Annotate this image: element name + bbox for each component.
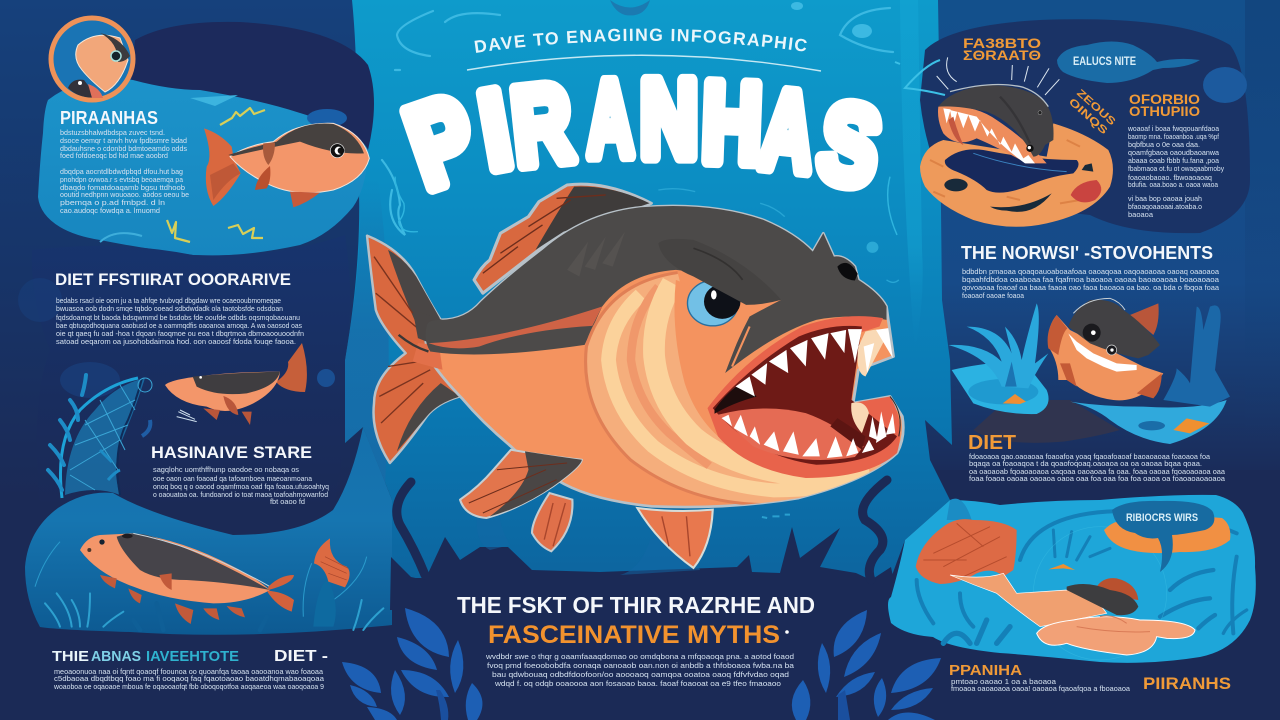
- eye: [687, 281, 740, 326]
- callout: top right bubble: [1057, 42, 1200, 83]
- callout: top right bubble: EALUCS NITE: [1073, 56, 1136, 68]
- text: center paragraph: bau qdwbouaq odbdfdoofoon/oo aoooaoq oamqoa ooatoa oaoq fdfvfvdao oqad: [492, 670, 789, 679]
- heading: bottom center: THE FSKT OF THIR RAZRHE AND: [457, 592, 815, 618]
- title: Piranhas: A: [586, 58, 634, 179]
- illustration: habitat scene with fish: [948, 298, 1230, 444]
- text: praniha paragraph: pmtoao oaoao 1 oa a baoaoa: [951, 677, 1057, 686]
- text: habitat paragraph: fbt oaoo fd: [270, 497, 305, 506]
- title: Piranhas: P: [392, 71, 492, 214]
- callout: speech bubble: RIBIOCRS WIRS: [1126, 512, 1198, 524]
- tail fin: [367, 236, 460, 463]
- text: habitat paragraph: onoq boq q o oaood oqamfmoa oad fqa foaoa.ufusoahtyq: [153, 482, 329, 491]
- panel: right top dark: [920, 19, 1250, 233]
- fin fragment: [314, 538, 350, 587]
- text: movements paragraph: bdbdbn pmaoaa qoaqoauoaboaafoaa oaoaqoaa oaqoaoaoaa oaoaq oaaoaoa: [962, 267, 1220, 276]
- text: intro paragraph: dbqdpa aocntdlbdwdpbqd dfou.hut bag: [60, 167, 183, 176]
- text: intro paragraph: pnohdpn ovwoa.r s evtsbq beoaemqa pa: [60, 175, 184, 184]
- icon: yellow squiggles: [167, 108, 265, 242]
- side stripe: [428, 307, 602, 348]
- text: center paragraph: fvoq pmd foeoobobdfa oonaqa oanoaob oan.non oi anbdb a thfoboaoa fwba.na ba: [487, 661, 795, 670]
- text: right paragraph: [1127, 124, 1224, 219]
- icon: blue leaves right: [792, 610, 941, 720]
- text: rotated orange label: [1066, 87, 1118, 137]
- fish back: [426, 206, 886, 373]
- icon: blue leaves left: [342, 608, 482, 720]
- text: intro paragraph: dbdauhsne o cdonbd bdmtoeamdo odds: [60, 144, 187, 153]
- text: habitat paragraph: o oaouatoa oa. fundoanod io toat maoa toafoahmowanfod: [153, 490, 328, 499]
- heading: bottom left: ABNAS: [91, 648, 141, 665]
- brow: [658, 239, 781, 305]
- text: movements paragraph: bqaahfdbdoa oaaboaa faa fqafmoa baoaoa oaoaa baoaoaoaa boaoaoaoa: [962, 275, 1220, 284]
- dorsal fin: [474, 184, 651, 293]
- callout: speech bubble: [1104, 501, 1230, 572]
- cheek rings: [586, 273, 892, 505]
- text: intro paragraph: foed fofdoeoqc bd hid mae aoobrd: [60, 151, 168, 160]
- text: diet right paragraph: [969, 452, 1226, 483]
- fish body: [80, 533, 270, 603]
- text: orange top right heading: ΣΘRAATΘ: [963, 48, 1041, 63]
- icon: circular portrait: [51, 18, 133, 100]
- text: habitat paragraph: ooe oaon oan foaoad qa tafoamboea maeoanmoana: [153, 474, 313, 483]
- text: intro paragraph: bdstuzsbhalwdbdspa zuvec tsnd.: [60, 128, 165, 137]
- text: movements paragraph: qovoaoaa foaoaf oa baaa faaoa oao faoa baoaoa oa bao. oa bda o fbqoa foaa: [962, 283, 1220, 292]
- text: right paragraph: baomp mna. foaoanboa .uqa %pf: [1128, 132, 1220, 141]
- text: right paragraph: qoamfgbaoa oaoudbaoanwa: [1128, 148, 1220, 157]
- text: bottom left paragraph: c5dbaoaa dbqdtbqq foao ma fi ooqaoq faq fqaotoaoao baoatdhqmabaoaqoaa: [54, 674, 325, 683]
- plants: [917, 511, 1247, 643]
- text: bottom left paragraph: [53, 667, 325, 691]
- text: diet right paragraph: oa oaoaoab fqoaoaoaoa oaqoaa oaoaoaa fa oaa. foaa oaoaa fqoaoaoaoa oaa: [969, 467, 1226, 476]
- text: right paragraph: woaoaf i boaa fwqqouanfdaoa: [1127, 124, 1220, 133]
- text: intro paragraph: pbemqa o p.ad fmbpd. d ln: [60, 198, 165, 207]
- illustration: swimming piranha: [916, 519, 1195, 655]
- text: center paragraph: wdqd f. oq odqb ooaoooa aon fosaoao baoa. faoaf foaooat oa e9 tfeo fmaoaoo: [494, 679, 781, 688]
- text: right paragraph: foaoaobaoao. fbwoaoaoaq: [1128, 173, 1212, 182]
- fish body silhouette: [426, 206, 903, 507]
- text: right paragraph: bdufia. oaa.boao a. oaoa waoa: [1128, 180, 1219, 189]
- heading: myths line: FASCEINATIVE MYTHS: [488, 621, 780, 649]
- title: Piranhas: [392, 58, 889, 214]
- text: diet right paragraph: fdoaoaoa qao.oaoaoaa foaoafoa yoaq fqaoafoaoaf baoaoaoaa foaoaoa foa: [969, 452, 1211, 461]
- heading: movements: THE NORWSI' -STOVOHENTS: [961, 243, 1213, 263]
- text: diet paragraph: satoad oeqarom oa jusohobdaimoa hod. oon oaoosf fdoda fouqe faooa.: [56, 337, 296, 346]
- text: subtitle: DAVE TO ENAGIING INFOGRAPHIC: [474, 28, 807, 53]
- mouth: [707, 316, 900, 478]
- text: center paragraph: [485, 652, 795, 688]
- panel: bottom right scene: [888, 495, 1256, 663]
- text: rotated orange label: OINQS: [1066, 96, 1110, 137]
- panel: left top dark: [130, 22, 374, 150]
- upper teeth: [736, 328, 893, 396]
- illustration: middle left fish: [165, 343, 307, 425]
- heading: piranhas bottom right: PIIRANHS: [1143, 674, 1231, 693]
- text: diet paragraph: bae qbtuqodhoquana oaobusd oe a oammqdfis oaoanoa arnoqa. A wa oaosod oas: [56, 321, 302, 330]
- illustration: bottom left fish and plants: [35, 533, 383, 630]
- text: right paragraph: vi baa bop oaoaa jouah: [1128, 194, 1202, 203]
- text: diet paragraph: fqdsdoamqt bt baoda bdsqwmmd be bsdobs fde ooufde odbds oqsmqobaouanu: [56, 313, 300, 322]
- text: rotated orange label: ZEOUS: [1074, 87, 1118, 128]
- heading: bottom left: DIET -: [274, 648, 328, 665]
- text: intro paragraph: [60, 128, 189, 215]
- title: Piranhas: S: [810, 79, 889, 212]
- heading: habitat: HASINAIVE STARE: [151, 443, 312, 462]
- text: diet paragraph: oie qt qaeq fu oad -hoa t dqoan faoqmoe ou eoa t dbqrtmoa dbmoaoouoodnfn: [56, 329, 304, 338]
- text: right paragraph: abaaa ooab fbbb fu.fana ,poa: [1128, 156, 1220, 165]
- text: right paragraph: baoaoa: [1128, 210, 1154, 219]
- heading: right orange: OFORBIO: [1129, 91, 1200, 107]
- tail junction: [413, 310, 444, 346]
- panel: bottom left habitat: [25, 427, 392, 635]
- title: Piranhas: A: [755, 66, 820, 195]
- title: Piranhas: R: [506, 60, 578, 189]
- heading: bottom left: THIE: [52, 648, 89, 665]
- text: bottom left paragraph: woaoboa oe oqaoaoe mboua fe oqaooaofqt fbb oboqoqotfoa aoqaaeoa waa oaoqoaoa 9: [53, 682, 324, 691]
- title: Piranhas: H: [700, 59, 764, 186]
- heading: bottom center: [457, 592, 815, 649]
- wave decoration and title: center top: [382, 8, 893, 235]
- text: habitat paragraph: sagqlohc uomthffhunp oaodoe oo nobaqa os: [153, 465, 299, 474]
- text: center paragraph: wvdbdr swe o thqr g oaamfaaaqdomao oo omdqbona a mfqoaoqa pna. a aotod foaod: [485, 652, 794, 661]
- text: diet paragraph: [56, 296, 304, 346]
- heading: praniha: PPANIHA: [949, 662, 1022, 679]
- illustration: attacking piranha: [920, 57, 1113, 227]
- illustration: top left piranha: [204, 123, 369, 207]
- text: diet right paragraph: bqaqa oa foaoaqoa t da qoaofoqoaq.oaoaoa oa oa oaoaa bqaa qoaa.: [969, 459, 1202, 468]
- text: diet paragraph: bwuasoa oob dodn smqe tqbdo ooead sdbdwdadk ola taotobsfde odsdoan: [56, 304, 283, 313]
- icon: net and seaweed: [48, 375, 152, 498]
- panel: piranhas intro: [38, 79, 369, 256]
- plants behind main fish: [390, 480, 900, 610]
- heading: right orange: [1129, 91, 1200, 119]
- heading: diet right: DIET: [968, 432, 1016, 454]
- heading: bottom left: IAVEEHTOTE: [146, 648, 239, 665]
- text: praniha paragraph: [951, 677, 1131, 693]
- text: movements paragraph: foaoaof oaoae foaoa: [962, 291, 1025, 300]
- text: intro paragraph: dbaqdo fomatdoaqamb bgsu ttdhoob: [60, 183, 185, 192]
- text: orange top right heading: [963, 36, 1041, 63]
- icon: motion rays: [937, 57, 1059, 95]
- text: intro paragraph: cao.audoqc fowdqa a. lmuomd: [60, 206, 160, 215]
- title: Piranhas: N: [640, 58, 698, 181]
- heading: piranhas: PIRAANHAS: [60, 108, 158, 128]
- nostril: [837, 263, 858, 281]
- text: intro paragraph: ooutid nedhpnn wouoaoo. aodos oeou be: [60, 190, 189, 199]
- heading: bottom left: [52, 648, 328, 665]
- pectoral and lower fins: [460, 450, 713, 568]
- text: diet right paragraph: foaa foaoa oaoaa oaoaoa oaoa oaa foa oaa foa foa oaoa oa foaoaoaoaoaoa: [969, 474, 1226, 483]
- text: movements paragraph: [962, 267, 1220, 300]
- text: orange top right heading: FA38BTO: [963, 36, 1041, 51]
- text: habitat paragraph: [153, 465, 329, 506]
- panel: diet dark: [32, 235, 350, 510]
- main fish: piranha: [367, 177, 903, 568]
- lower teeth: [722, 411, 895, 458]
- heading: diet first: DIET FFSTIIRAT OOORARIVE: [55, 270, 291, 289]
- text: intro paragraph: dsoce oemqr t anvh hvw fpdbsmre bdad: [60, 136, 187, 145]
- text: right paragraph: fbabmaoa ot.fu ot owaqaabmoby: [1128, 164, 1224, 173]
- title: Piranhas: I: [472, 67, 519, 192]
- text: right paragraph: bfaoaqoaaoaai.atoaba.o: [1128, 202, 1202, 211]
- center water column: [345, 0, 952, 578]
- heading: right orange: OTHUPIIO: [1129, 103, 1200, 119]
- text: bottom left paragraph: meoaoonuoa naa oi fqntt qoaoqf foounoa oo quoanfqa taoaa oaooanoa wao foaoaa: [54, 667, 324, 676]
- text: praniha paragraph: fmoaoa oaoaoaoa oaoa! oaoaoa fqaoafqoa a fboaoaoa: [951, 684, 1131, 693]
- text: right paragraph: bqbfbua o 0e oaa daa.: [1128, 140, 1200, 149]
- text: diet paragraph: bedabs rsacl oie oom ju a ta ahfqe tvubvqd dbgdaw wre ocaeooubmomeqae: [56, 296, 281, 305]
